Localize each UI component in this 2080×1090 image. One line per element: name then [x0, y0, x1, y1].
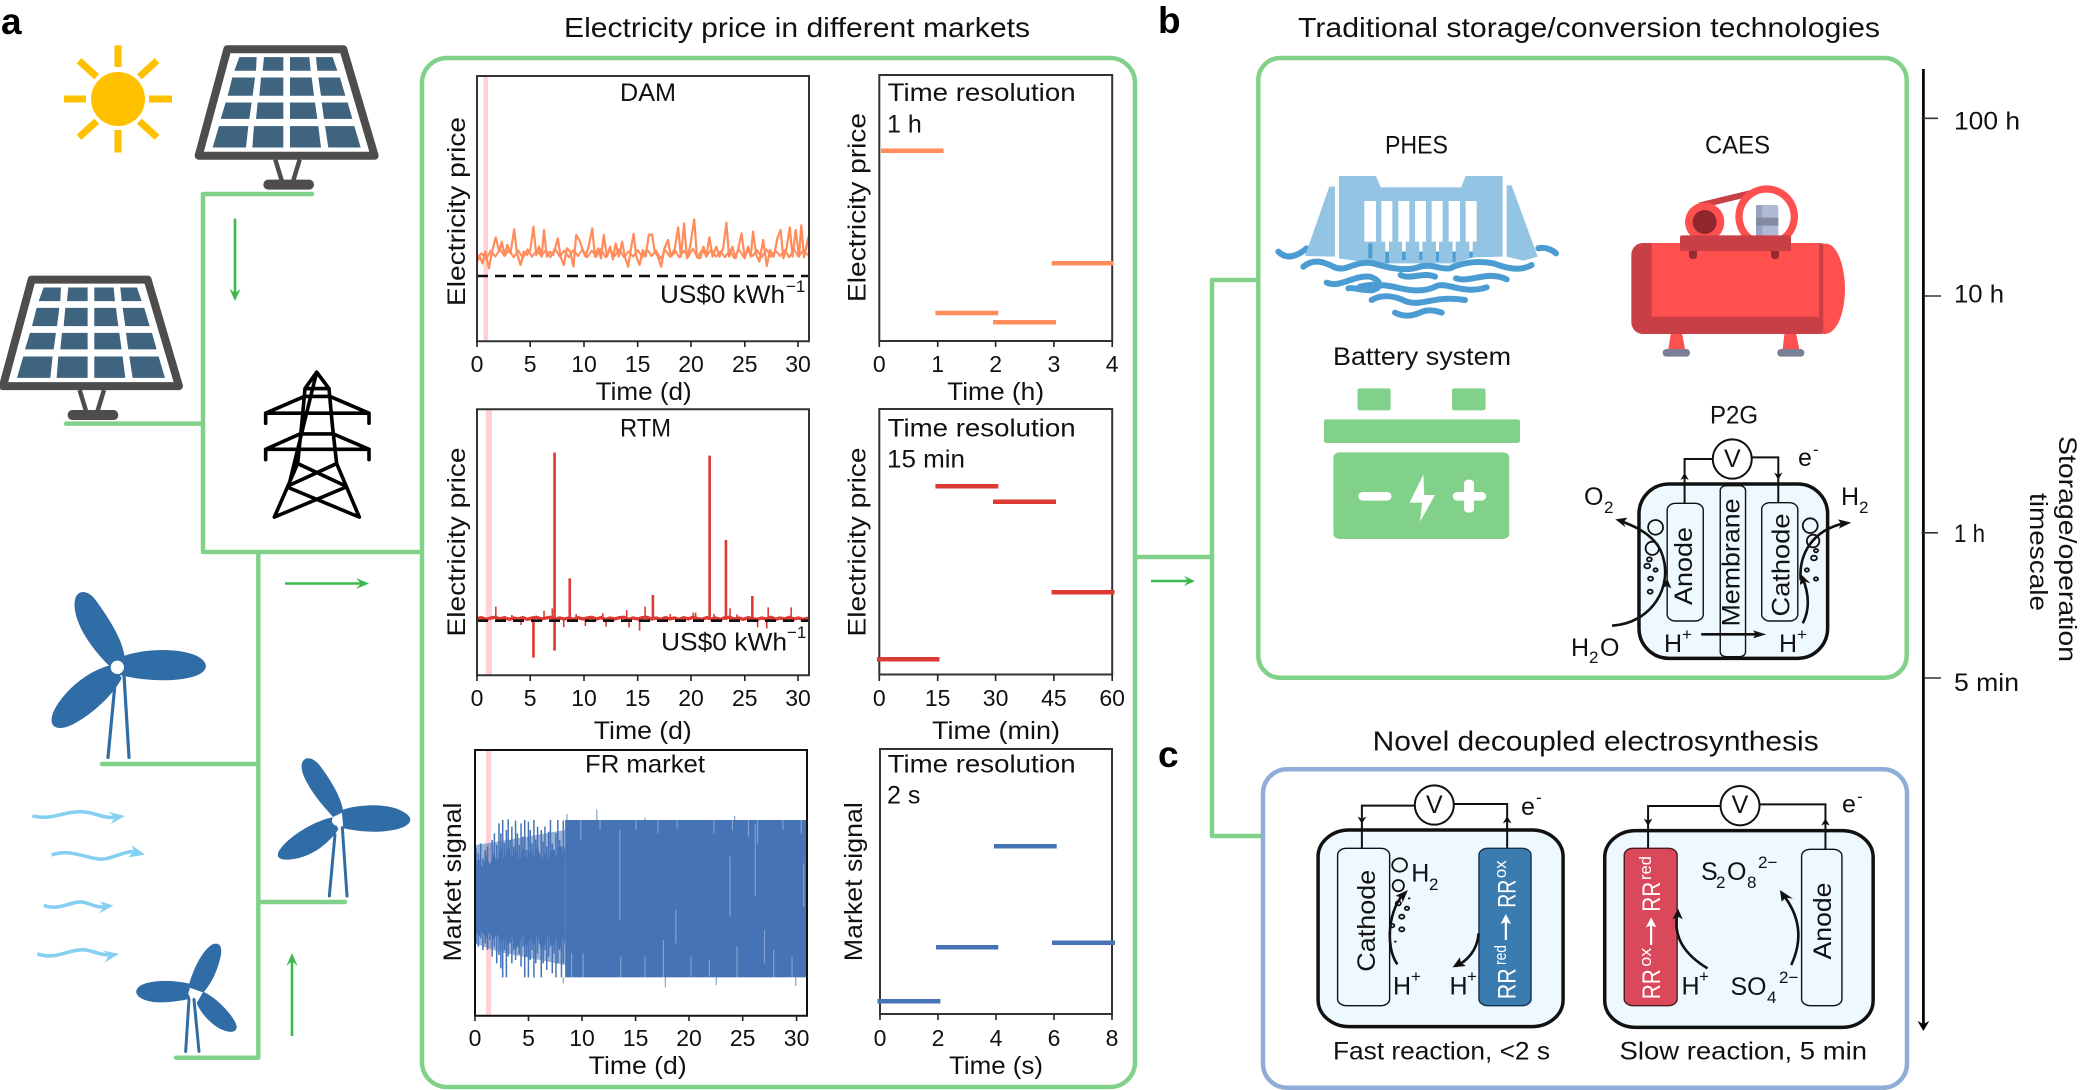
chart: RTM 15 min resolution: 30	[983, 685, 1008, 711]
chart: FR 2 s resolution: 2 s	[887, 781, 920, 809]
diagram: slow reaction cell: 2−	[1758, 853, 1777, 872]
diagram: fast reaction cell: red	[1491, 945, 1510, 965]
chart: DAM price	[443, 76, 811, 406]
diagram: slow reaction cell: red	[1636, 856, 1655, 880]
panel label b: b	[1158, 0, 1181, 41]
icon: sun	[64, 45, 172, 152]
diagram: fast reaction cell: ox	[1491, 860, 1510, 878]
chart: DAM 1 h resolution: 3	[1048, 351, 1060, 377]
diagram: fast reaction cell: V	[1426, 791, 1443, 819]
icon: hydro dam	[1278, 176, 1556, 316]
timescale axis: 10 h	[1954, 280, 2004, 308]
chart: RTM 15 min resolution: 45	[1041, 685, 1067, 711]
diagram: slow reaction cell: 2	[1716, 873, 1725, 892]
chart: DAM 1 h resolution: Time resolution	[888, 79, 1076, 107]
chart: DAM price: US$0 kWh	[660, 281, 785, 309]
heading: traditional technologies: Traditional storage/conversion technologies	[1298, 12, 1880, 43]
diagram: fast reaction cell: RR	[1493, 968, 1521, 999]
icon: transmission tower	[266, 372, 369, 517]
diagram: fast reaction cell: +	[1467, 967, 1477, 986]
heading: electricity price: Electricity price in different markets	[564, 12, 1030, 43]
diagram: fast reaction cell: 2	[1429, 875, 1438, 894]
diagram: slow reaction cell: Anode	[1809, 882, 1837, 960]
chart: RTM price	[443, 409, 811, 745]
diagram: fast reaction cell: H	[1393, 972, 1411, 1000]
chart: FR market signal: 10	[569, 1025, 595, 1051]
chart: DAM price: 5	[524, 351, 537, 377]
chart: DAM price: 30	[785, 351, 811, 377]
chart: RTM 15 min resolution: Time (min)	[932, 717, 1060, 745]
icon: solar panel left	[3, 280, 179, 420]
diagram: P2G electrolyser cell: O	[1584, 483, 1603, 511]
axis title: storage/operation timescale	[2024, 436, 2080, 662]
CAES label: CAES	[1705, 131, 1770, 159]
chart: DAM price: 10	[571, 351, 597, 377]
arrow: green right	[285, 578, 369, 589]
chart: FR 2 s resolution: 4	[990, 1025, 1003, 1051]
diagram: P2G electrolyser cell: 2	[1589, 648, 1598, 667]
chart: RTM 15 min resolution: 15	[925, 685, 950, 711]
timescale axis: 1 h	[1954, 520, 1985, 548]
chart: DAM 1 h resolution: 1 h	[887, 110, 922, 138]
chart: DAM 1 h resolution: 4	[1106, 351, 1119, 377]
axis title: storage/operation timescale: timescale	[2024, 493, 2052, 611]
arrow: green right to storage	[1151, 576, 1195, 586]
chart: FR market signal: 30	[784, 1025, 809, 1051]
chart: FR 2 s resolution	[840, 749, 1118, 1080]
diagram: slow reaction cell: e	[1842, 791, 1856, 819]
icon: wind flow arrows	[32, 812, 145, 963]
icon: wind turbine small	[136, 944, 237, 1051]
chart: RTM 15 min resolution: 60	[1099, 685, 1125, 711]
chart: RTM price: Electricity price	[443, 448, 471, 636]
chart: FR market signal: FR market	[585, 751, 705, 779]
diagram: fast reaction cell: +	[1411, 967, 1421, 986]
chart: FR market signal: 5	[522, 1025, 535, 1051]
timescale axis	[1918, 69, 2020, 1031]
caption: slow reaction: Slow reaction, 5 min	[1620, 1037, 1867, 1065]
diagram: fast reaction cell: H	[1450, 972, 1468, 1000]
chart: RTM 15 min resolution: Time resolution	[888, 415, 1076, 443]
chart: FR market signal	[439, 750, 809, 1080]
chart: DAM 1 h resolution: 1	[931, 351, 944, 377]
chart: RTM price: 10	[571, 685, 597, 711]
chart: RTM price: 0	[471, 685, 483, 711]
chart: RTM price: US$0 kWh	[661, 629, 787, 657]
diagram: fast reaction cell: Cathode	[1353, 870, 1381, 972]
diagram: slow reaction cell: S	[1701, 858, 1718, 886]
energy source connecting lines	[66, 194, 421, 1058]
icon: battery	[1324, 388, 1520, 539]
panel: electricity markets	[422, 58, 1135, 1087]
chart: RTM 15 min resolution: 0	[873, 685, 886, 711]
diagram: P2G electrolyser cell: +	[1682, 625, 1692, 644]
chart: DAM price: DAM	[620, 79, 676, 107]
diagram: P2G electrolyser cell: -	[1813, 440, 1819, 459]
diagram: slow reaction cell: V	[1732, 791, 1749, 819]
diagram: P2G electrolyser cell: +	[1797, 625, 1807, 644]
chart: DAM price: 25	[732, 351, 758, 377]
chart: DAM price: 15	[625, 351, 650, 377]
chart: FR 2 s resolution: Time (s)	[949, 1052, 1043, 1080]
P2G label: P2G	[1710, 401, 1758, 429]
diagram: P2G electrolyser cell: 2	[1859, 498, 1868, 517]
diagram: P2G electrolyser cell: Membrane	[1718, 498, 1746, 626]
chart: DAM 1 h resolution: 0	[873, 351, 886, 377]
diagram: fast reaction cell: -	[1536, 788, 1542, 807]
chart: DAM 1 h resolution: 2	[989, 351, 1002, 377]
chart: FR market signal: 15	[623, 1025, 648, 1051]
diagram: P2G electrolyser cell: H	[1571, 634, 1589, 662]
chart: FR market signal: Market signal	[439, 802, 467, 962]
chart: RTM price: Time (d)	[594, 717, 692, 745]
diagram: P2G electrolyser cell: e	[1798, 444, 1812, 472]
diagram: P2G electrolyser cell: V	[1724, 445, 1741, 473]
diagram: slow reaction cell: ox	[1636, 947, 1655, 967]
diagram: slow reaction cell: RR	[1638, 882, 1666, 912]
Battery system label: Battery system	[1333, 343, 1511, 371]
panel: novel decoupled electrosynthesis	[1263, 769, 1907, 1088]
diagram: slow reaction cell: RR	[1638, 969, 1666, 999]
diagram: fast reaction cell: H	[1411, 860, 1429, 888]
diagram: slow reaction cell: 4	[1767, 988, 1776, 1007]
icon: air compressor	[1631, 185, 1845, 357]
chart: FR 2 s resolution: Market signal	[840, 802, 868, 961]
PHES label: PHES	[1385, 131, 1448, 159]
chart: DAM price: Time (d)	[596, 378, 692, 406]
chart: FR market signal: 25	[730, 1025, 755, 1051]
diagram: P2G electrolyser cell: Cathode	[1768, 514, 1796, 616]
connector lines from markets to storage panels	[1136, 280, 1262, 836]
chart: FR market signal: Time (d)	[589, 1052, 687, 1080]
chart: DAM price: −1	[786, 277, 805, 296]
panel label c: c	[1158, 734, 1179, 775]
chart: RTM price: −1	[787, 623, 806, 642]
chart: FR market signal: 20	[676, 1025, 702, 1051]
diagram: slow reaction cell: SO	[1730, 973, 1766, 1001]
icon: solar panel top	[199, 49, 375, 190]
diagram: slow reaction cell: 2−	[1779, 968, 1798, 987]
diagram: fast reaction cell: RR	[1493, 880, 1521, 908]
chart: RTM 15 min resolution: Electricity price	[844, 448, 872, 636]
arrow: green down	[230, 219, 240, 301]
chart: RTM price: 20	[678, 685, 704, 711]
diagram: slow reaction cell: O	[1727, 858, 1746, 886]
icon: wind turbine middle	[278, 758, 410, 896]
diagram: P2G electrolyser cell	[1571, 439, 1868, 667]
chart: RTM price: 25	[732, 685, 758, 711]
chart: DAM 1 h resolution: Time (h)	[947, 378, 1044, 406]
chart: DAM price: 20	[678, 351, 704, 377]
chart: FR 2 s resolution: 6	[1048, 1025, 1060, 1051]
chart: FR 2 s resolution: 2	[932, 1025, 944, 1051]
heading: novel electrosynthesis: Novel decoupled electrosynthesis	[1373, 726, 1819, 757]
diagram: slow reaction cell: -	[1857, 787, 1863, 806]
caption: fast reaction: Fast reaction, <2 s	[1333, 1037, 1550, 1065]
chart: RTM price: RTM	[620, 415, 671, 443]
chart: DAM price: Electricity price	[443, 117, 471, 306]
diagram: slow reaction cell: +	[1699, 967, 1709, 986]
diagram: P2G electrolyser cell: H	[1664, 630, 1682, 658]
icon: wind turbine large	[52, 592, 206, 757]
diagram: P2G electrolyser cell: H	[1779, 630, 1797, 658]
timescale axis: 100 h	[1954, 107, 2020, 135]
chart: FR 2 s resolution: 8	[1106, 1025, 1118, 1051]
panel label a: a	[1, 1, 22, 42]
diagram: P2G electrolyser cell: 2	[1604, 498, 1613, 517]
chart: FR market signal: 0	[469, 1025, 481, 1051]
panel: traditional storage technologies	[1258, 58, 1907, 678]
chart: FR 2 s resolution: Time resolution	[888, 751, 1076, 779]
diagram: P2G electrolyser cell: O	[1600, 634, 1619, 662]
diagram: slow reaction cell: 8	[1747, 873, 1756, 892]
diagram: P2G electrolyser cell: H	[1841, 483, 1859, 511]
chart: RTM price: 5	[524, 685, 537, 711]
chart: DAM 1 h resolution: Electricity price	[844, 113, 872, 302]
chart: RTM price: 30	[785, 685, 811, 711]
diagram: slow reaction cell	[1605, 786, 1873, 1027]
chart: DAM 1 h resolution	[844, 75, 1119, 406]
chart: RTM 15 min resolution	[844, 409, 1125, 745]
timescale axis: 5 min	[1954, 669, 2019, 697]
chart: FR 2 s resolution: 0	[874, 1025, 886, 1051]
chart: RTM price: 15	[625, 685, 650, 711]
diagram: P2G electrolyser cell: Anode	[1670, 527, 1698, 605]
diagram: slow reaction cell: H	[1682, 972, 1700, 1000]
diagram: fast reaction cell	[1318, 785, 1563, 1027]
chart: RTM 15 min resolution: 15 min	[887, 445, 965, 473]
diagram: fast reaction cell: e	[1521, 793, 1535, 821]
chart: DAM price: 0	[471, 351, 483, 377]
arrow: green up	[286, 953, 298, 1036]
